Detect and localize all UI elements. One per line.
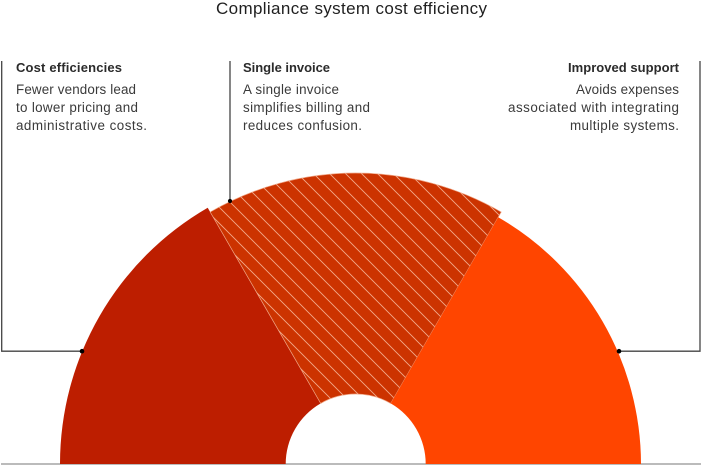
description: improved support bbox=[508, 82, 679, 133]
heading: improved support: Improved support bbox=[568, 60, 680, 75]
connector: cost efficiencies bbox=[2, 61, 84, 354]
description: cost efficiencies bbox=[16, 82, 147, 133]
description: single invoice bbox=[243, 82, 370, 133]
description: single invoice: reduces confusion. bbox=[243, 118, 362, 133]
connector: improved support bbox=[617, 61, 700, 354]
semicircle chart bbox=[60, 173, 641, 464]
baseline bbox=[1, 463, 701, 465]
description: single invoice: A single invoice bbox=[243, 82, 339, 97]
description: improved support: Avoids expenses bbox=[576, 82, 679, 97]
text block: improved support bbox=[508, 60, 680, 133]
heading: cost efficiencies: Cost efficiencies bbox=[16, 60, 122, 75]
heading: single invoice: Single invoice bbox=[243, 60, 330, 75]
description: cost efficiencies: Fewer vendors lead bbox=[16, 82, 136, 97]
connector: single invoice bbox=[228, 61, 232, 203]
slice: improved support bbox=[391, 217, 641, 464]
slice: single invoice bbox=[210, 173, 501, 403]
text block: single invoice bbox=[243, 60, 370, 133]
description: improved support: associated with integrating bbox=[508, 100, 679, 115]
description: improved support: multiple systems. bbox=[570, 118, 679, 133]
text block: cost efficiencies bbox=[16, 60, 147, 133]
slice: cost efficiencies bbox=[60, 208, 321, 464]
description: cost efficiencies: to lower pricing and bbox=[16, 100, 138, 115]
description: single invoice: simplifies billing and bbox=[243, 100, 370, 115]
description: cost efficiencies: administrative costs. bbox=[16, 118, 147, 133]
